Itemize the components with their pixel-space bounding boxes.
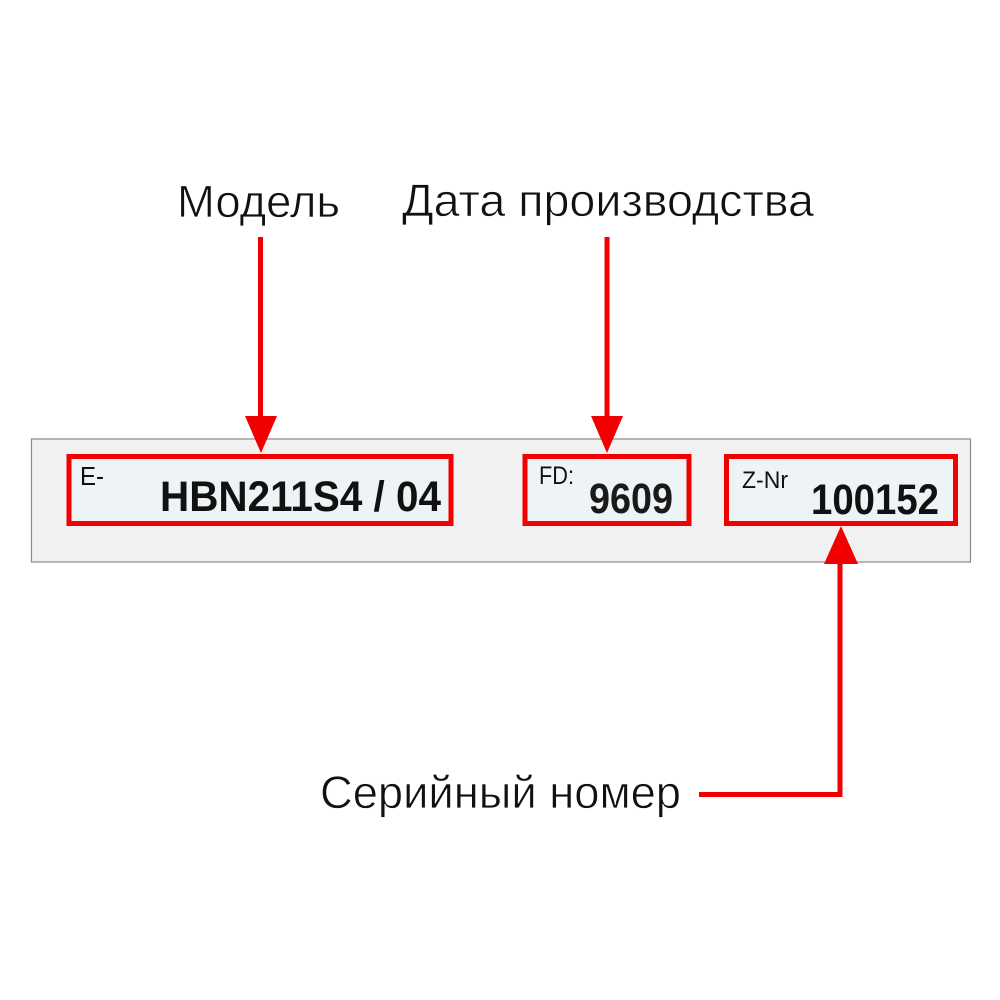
production date box: 9609	[589, 475, 673, 523]
serial number box	[726, 456, 956, 524]
serial number box: 100152	[811, 476, 939, 524]
production date box	[525, 456, 689, 524]
heading: serial number: Серийный номер	[320, 767, 681, 818]
model box: HBN211S4 / 04	[160, 473, 441, 521]
model box	[69, 456, 451, 524]
arrow: production date	[591, 237, 623, 453]
label panel	[32, 439, 970, 562]
serial number box: Z-Nr	[742, 467, 788, 494]
model box: E-	[80, 461, 104, 491]
heading: production date: Дата производства	[402, 175, 815, 226]
production date box: FD:	[539, 462, 574, 490]
arrow: model	[245, 237, 277, 453]
heading: model: Модель	[177, 176, 340, 227]
arrow: serial number	[699, 526, 858, 794]
